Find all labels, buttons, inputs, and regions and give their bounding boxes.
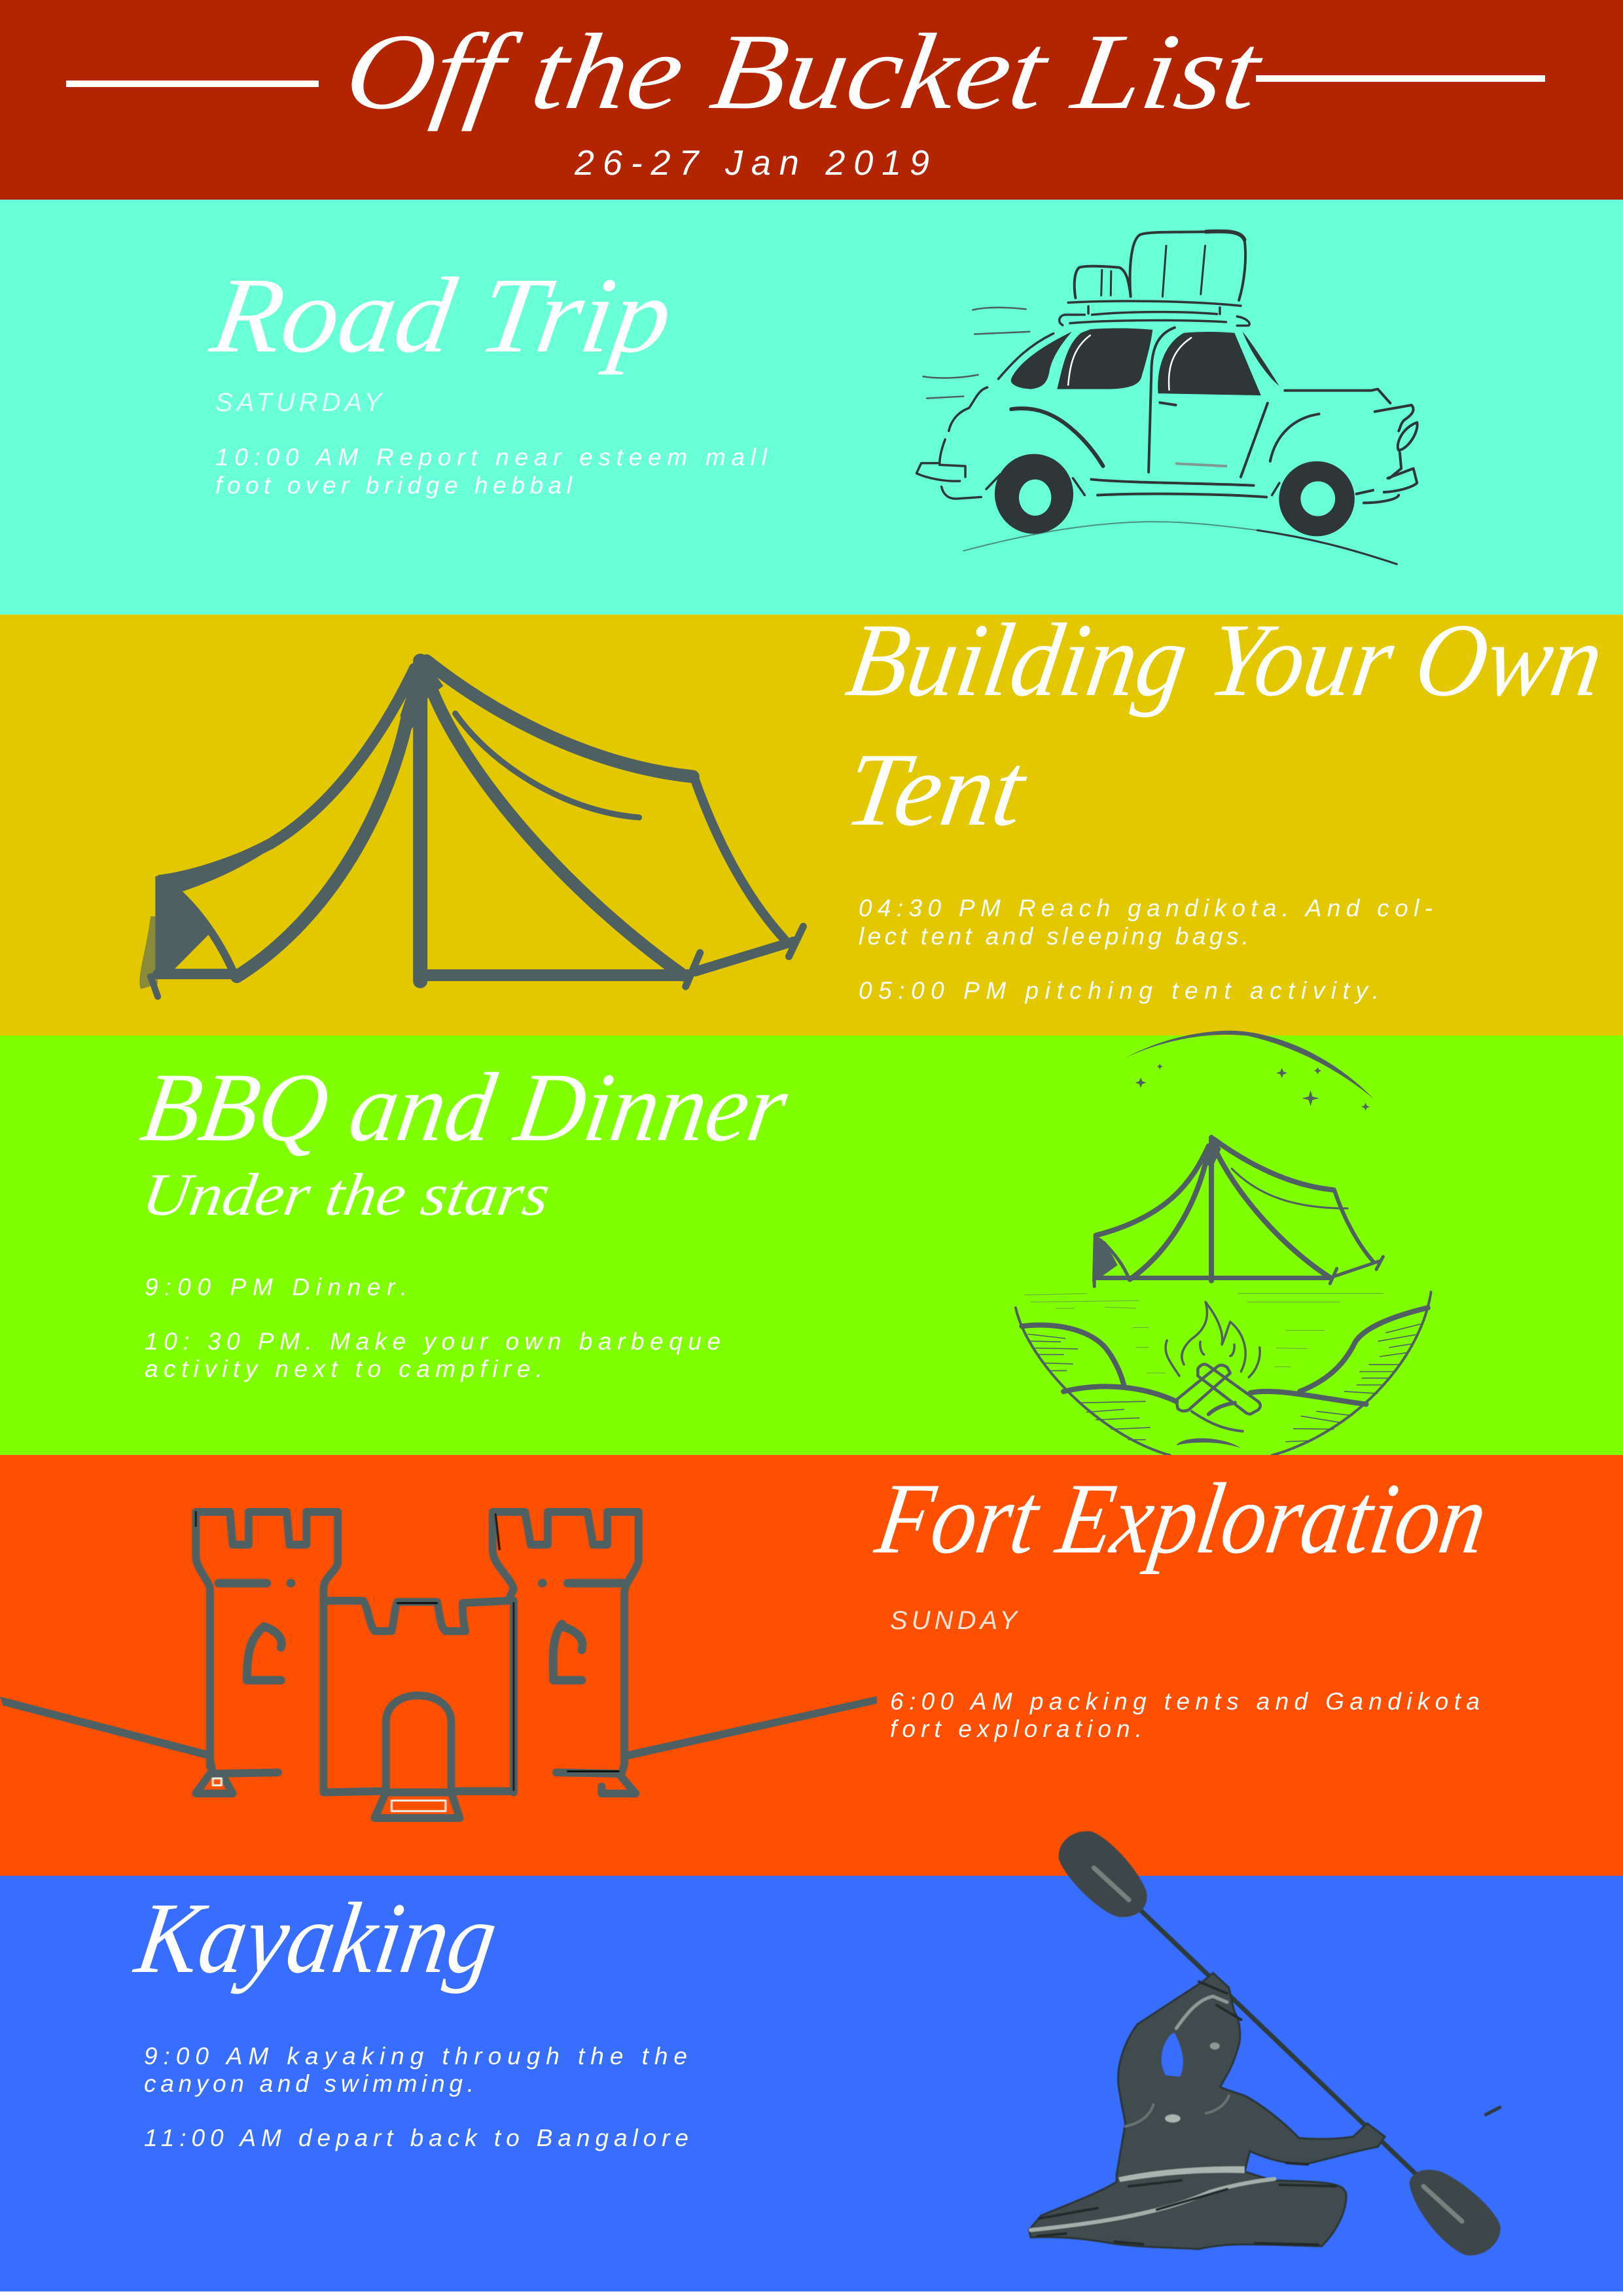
text: fort schedule <box>890 1688 1480 1742</box>
panel: header <box>0 0 1623 200</box>
date: 26-27 Jan 2019 <box>574 143 929 183</box>
heading: fort exploration: Fort Exploration <box>869 1462 1495 1575</box>
left title rule <box>66 81 319 87</box>
day label: saturday: SATURDAY <box>215 388 383 417</box>
heading: bbq and dinner: BBQ and Dinner <box>135 1053 795 1162</box>
heading: building your own tent: Tent <box>838 732 1035 848</box>
panel: building your own tent <box>0 602 1623 1035</box>
day label: sunday: SUNDAY <box>890 1606 1019 1635</box>
panel: kayaking <box>0 1831 1623 2291</box>
right title rule <box>1256 75 1545 82</box>
heading: kayaking: Kayaking <box>128 1882 505 1994</box>
text: dinner schedule: 10: 30 PM. Make your own barbeque <box>145 1328 721 1355</box>
text: kayaking schedule: canyon and swimming. <box>144 2070 474 2097</box>
heading: road trip: Road Trip <box>204 255 680 375</box>
panel: road trip <box>0 200 1623 615</box>
text: kayaking schedule: 11:00 AM depart back to Bangalore <box>144 2125 688 2151</box>
text: tent schedule: 05:00 PM pitching tent activity. <box>859 977 1379 1004</box>
subheading: under the stars: Under the stars <box>138 1162 554 1229</box>
icon: tent <box>139 653 803 997</box>
text: fort schedule: 6:00 AM packing tents and Gandikota <box>890 1688 1480 1715</box>
text: tent schedule: lect tent and sleeping bags. <box>859 923 1249 950</box>
text: tent schedule: 04:30 PM Reach gandikota. And col- <box>859 895 1433 922</box>
icon: fort <box>0 1512 877 1818</box>
text: dinner schedule <box>145 1274 721 1382</box>
icon: tent and campfire under the stars <box>1016 1031 1431 1456</box>
text: fort schedule: fort exploration. <box>890 1715 1142 1742</box>
title: Off the Bucket List <box>338 12 1270 132</box>
icon: car with luggage <box>916 231 1418 564</box>
panel: fort exploration <box>0 1455 1623 1876</box>
text: kayaking schedule <box>144 2043 688 2151</box>
text: road trip schedule: foot over bridge hebbal <box>215 472 573 499</box>
text: dinner schedule: 9:00 PM Dinner. <box>145 1274 407 1300</box>
text: road trip schedule <box>215 444 768 499</box>
text: kayaking schedule: 9:00 AM kayaking through the the <box>144 2043 687 2070</box>
text: road trip schedule: 10:00 AM Report near esteem mall <box>215 444 768 471</box>
panel: bbq and dinner <box>0 1031 1623 1456</box>
heading: building your own tent <box>838 602 1611 848</box>
text: dinner schedule: activity next to campfire. <box>145 1355 543 1382</box>
icon: kayaker with paddle <box>1029 1831 1501 2255</box>
text: tent schedule <box>859 895 1433 1004</box>
